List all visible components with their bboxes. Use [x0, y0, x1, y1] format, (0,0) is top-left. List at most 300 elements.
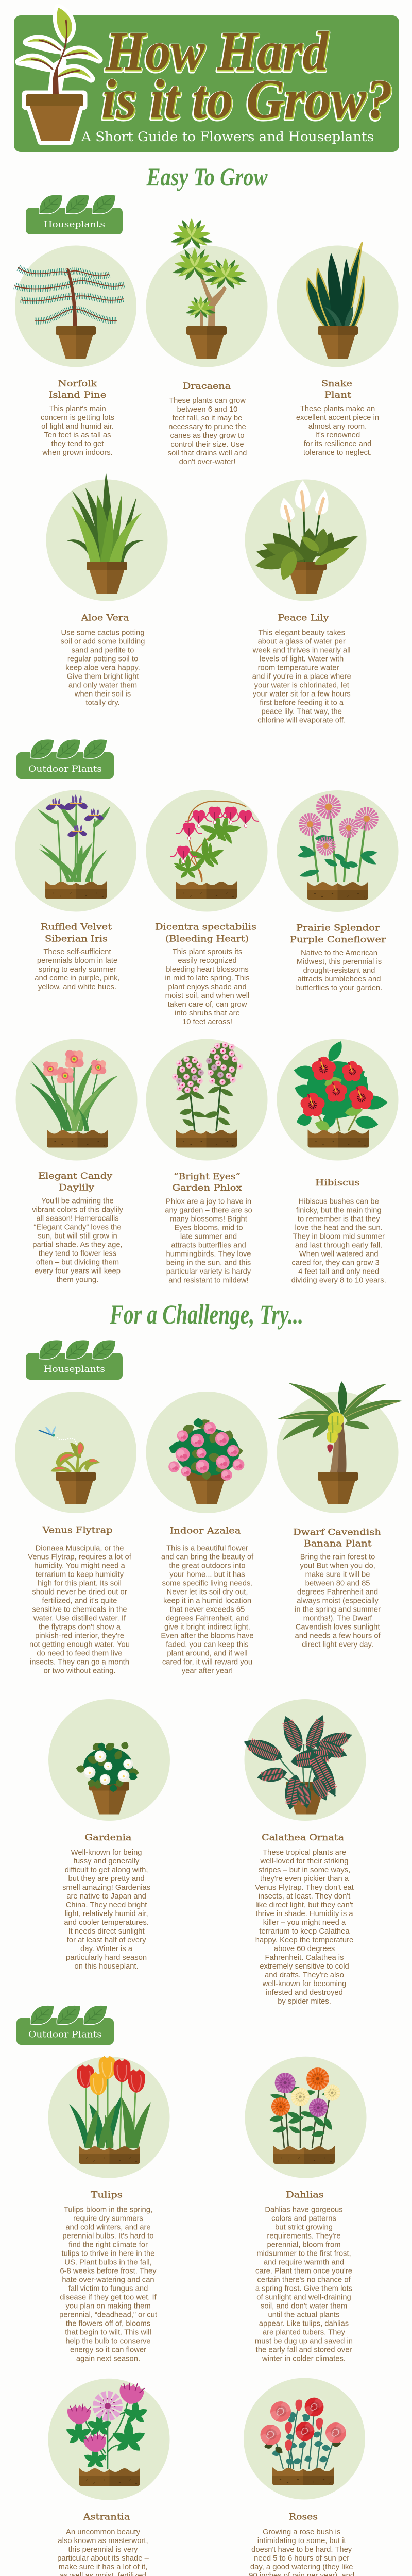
description: keep it in a humid location [163, 1597, 251, 1605]
description: particularly hard season [66, 1954, 147, 1962]
icon: Peace lily [254, 480, 360, 594]
tab: Outdoor Plants [16, 739, 114, 779]
description: perennial, bloom from [267, 2241, 341, 2249]
tab: Outdoor Plants: Outdoor Plants [28, 2030, 102, 2040]
description: vibrant colors of this daylily [32, 1206, 124, 1214]
title: is it to Grow? [101, 70, 392, 131]
description: extremely sensitive to cold [260, 1962, 349, 1971]
description: and last through early fall. [295, 1242, 382, 1250]
description: plant enjoys shade and [168, 983, 247, 991]
description: yellow, and white hues. [38, 983, 116, 991]
description: winter in colder climates. [262, 2355, 346, 2363]
description: your water sit for a few hours [253, 690, 351, 699]
header banner [14, 8, 399, 152]
name [293, 1527, 381, 1549]
description: levels of light. Water with [260, 655, 344, 664]
description: of light and humid air. [41, 422, 114, 431]
description: light, relatively humid air, [65, 1910, 148, 1918]
description: midsummer to the first frost, [256, 2250, 351, 2258]
name: Norfolk [58, 379, 97, 389]
description: intimidating to some, but it [258, 2537, 346, 2545]
description: many blossoms! Bright [170, 1215, 247, 1224]
description: require dry summers [73, 2215, 143, 2223]
description: These plants can grow [169, 397, 246, 405]
description: well-loved for their striking [260, 1857, 349, 1866]
description: regular potting soil to [67, 655, 138, 664]
description: and if you're in a place where [252, 673, 351, 681]
description: Midwest, this perennial is [297, 958, 382, 966]
description: hate over-watering and can [62, 2276, 154, 2284]
description: care. Plant them once you're [255, 2267, 352, 2276]
description: appear. Like tulips, dahlias [259, 2320, 349, 2328]
description: your home... but it has [169, 1571, 245, 1579]
description: drought-resistant and [303, 967, 375, 975]
description: for at least half of every [67, 1936, 146, 1944]
icon: Dracaena [170, 218, 247, 359]
description: These tropical plants are [263, 1849, 346, 1857]
description: plant around, and if well [167, 1650, 248, 1658]
description: help the bulb to conserve [65, 2337, 151, 2346]
name: Dicentra spectabilis [155, 922, 256, 933]
description: on this houseplant. [74, 1962, 139, 1971]
name: (Bleeding Heart) [165, 934, 249, 944]
description: Cavendish loves sunlight [296, 1623, 380, 1631]
name [321, 379, 352, 400]
description: of sunlight and well-draining [256, 2294, 351, 2302]
subtitle: A Short Guide to Flowers and Houseplants [81, 129, 374, 144]
description: almost any room. [308, 422, 367, 431]
description: again next season. [76, 2355, 140, 2363]
description: when their soil is [74, 690, 131, 699]
description: fertilized, and it's quite [42, 1597, 117, 1605]
description: like direct light, but they can't [255, 1901, 353, 1909]
description: Eyes blooms, mid to [174, 1224, 243, 1232]
description: Use some cactus potting [61, 629, 145, 637]
icon: Astrantia [65, 2381, 149, 2486]
description: often – but dividing them [36, 1259, 119, 1267]
name: Ruffled Velvet [41, 922, 112, 933]
description: 10 feet across! [182, 1018, 232, 1026]
description: a spring frost. Give them lots [255, 2285, 352, 2293]
description: disease if they get too wet. If [60, 2294, 157, 2302]
description: all season! Hemerocallis [36, 1215, 119, 1223]
description: moist soil, and when well [165, 992, 249, 1000]
description: to remember is that they [298, 1215, 380, 1224]
icon: Tulips [69, 2056, 151, 2164]
description: and cold winters, and are [65, 2224, 151, 2232]
panel: Calathea Ornata [241, 1699, 366, 2006]
panel: Dwarf Cavendish Banana Plant [277, 1381, 402, 1649]
description: always moist (especially [297, 1597, 379, 1605]
description: degrees Fahrenheit, and [166, 1615, 249, 1623]
icon: Norfolk pine [14, 267, 124, 359]
description: Well-known for being [71, 1849, 142, 1857]
description: also known as masterwort, [58, 2537, 148, 2545]
description: not getting enough water. You [29, 1641, 130, 1649]
description: and require warmth and [264, 2259, 344, 2267]
panel: Bleeding Heart [146, 790, 268, 1026]
description: sun, but will still grow in [38, 1232, 117, 1241]
description: peace lily. That way, the [262, 708, 342, 716]
description: finicky, but the main thing [296, 1207, 382, 1215]
icon: Phlox [172, 1042, 243, 1148]
description: perennials bloom in late [37, 957, 117, 965]
description: between 6 and 10 [177, 405, 237, 414]
description: killer – you might need a [263, 1919, 346, 1927]
panel: Siberian Iris [15, 790, 136, 991]
description: It's renowned [315, 431, 360, 439]
description: happy. Keep the temperature [255, 1936, 353, 1944]
description: feet tall, so it may be [173, 414, 242, 422]
description: Phlox are a joy to have in [166, 1198, 251, 1206]
description: They in bloom mid summer [293, 1233, 385, 1241]
description: or two without eating. [44, 1667, 115, 1675]
description: and drafts. They're also [265, 1971, 344, 1979]
description: faded, you can keep this [166, 1641, 249, 1649]
name: Snake [321, 379, 352, 389]
description: don't over-water! [179, 458, 235, 466]
panel: Dracaena [146, 218, 268, 466]
description: above 60 degrees [274, 1945, 335, 1953]
description: direct light every day. [302, 1640, 373, 1649]
description: any garden – there are so [165, 1207, 252, 1215]
description: are planted tubers. They [263, 2329, 346, 2337]
panel: Dahlias [245, 2057, 367, 2363]
icon: Iris [37, 794, 110, 899]
description: particular variety is hardy [166, 1268, 251, 1276]
description: energy so it can flower [70, 2346, 146, 2354]
panel: Tulips [48, 2056, 170, 2363]
panel: Peace Lily [245, 479, 367, 724]
description: This plant sprouts its [173, 948, 242, 956]
title: is it to Grow? [101, 69, 392, 130]
description: terrarium to keep Calathea [259, 1927, 350, 1936]
description: insects. They can go a month [30, 1658, 129, 1667]
description: terrarium to keep humidity [36, 1571, 124, 1579]
description: they're even pickier than a [260, 1875, 349, 1883]
description: soil or add some building [61, 638, 145, 646]
title: How Hard [105, 22, 329, 83]
description: when grown indoors. [42, 449, 113, 457]
panel: Aloe Vera [46, 472, 168, 707]
name: Garden Phlox [172, 1183, 242, 1193]
name: Dracaena [183, 381, 231, 392]
description: Even after the blooms have [161, 1632, 254, 1640]
description: taken care of, can grow [168, 1001, 247, 1009]
name: Plant [324, 390, 351, 400]
name: Peace Lily [278, 613, 329, 623]
title: How Hard [106, 22, 330, 83]
description: It needs direct sunlight [68, 1927, 145, 1936]
icon: Dahlias [269, 2067, 340, 2164]
panel: Snake Plant [277, 243, 399, 457]
description: requirements. They're [267, 2232, 341, 2241]
description: Hibiscus bushes can be [299, 1198, 379, 1206]
description: certain there's no chance of [257, 2276, 351, 2284]
name: Dahlias [286, 2190, 324, 2200]
description: but they are pretty and [68, 1875, 145, 1883]
icon: Venus flytrap [39, 1426, 100, 1504]
panel: Roses [244, 2378, 365, 2576]
icon: Daylily [30, 1050, 118, 1148]
description: being in the sun, and this [166, 1259, 251, 1267]
name [38, 1171, 112, 1193]
name [48, 379, 106, 400]
description: canes as they grow to [170, 432, 244, 440]
description: months!). The Dwarf [303, 1615, 372, 1623]
description: Never let its soil dry out, [167, 1588, 248, 1597]
name: Aloe Vera [80, 613, 129, 623]
description: and come in purple, pink, [35, 974, 120, 982]
description: by spider mites. [278, 1997, 331, 2006]
description: tulips to thrive in here in the [62, 2250, 154, 2258]
description: 6-8 weeks before frost. They [60, 2267, 157, 2276]
icon: Calathea [241, 1713, 354, 1815]
description: that never exceeds 65 [170, 1606, 245, 1614]
description: should never be dried out or [32, 1588, 127, 1597]
description: colors and patterns [271, 2215, 336, 2223]
name: Gardenia [84, 1833, 132, 1843]
description: about a glass of water per [258, 638, 346, 646]
description: These self-sufficient [43, 948, 111, 956]
name: Venus Flytrap [42, 1525, 113, 1535]
description: An uncommon beauty [66, 2528, 141, 2536]
tab: Houseplants [26, 195, 123, 234]
description: the flytraps don't show a [39, 1623, 121, 1632]
description: some specific living needs. [162, 1580, 253, 1588]
description: fall victim to fungus and [68, 2285, 148, 2293]
description: day. Winter is a [80, 1945, 133, 1953]
description: the early fall and stored over [256, 2346, 352, 2354]
description: into shrubs that are [175, 1009, 240, 1018]
title: is it to Grow? [102, 70, 393, 131]
description: hummingbirds. They love [166, 1250, 251, 1259]
name: “Bright Eyes” [174, 1172, 241, 1182]
description: well-known for becoming [262, 1980, 346, 1988]
panel: Norfolk Island Pine [14, 245, 136, 457]
description: Venus Flytrap, requires a lot of [28, 1553, 132, 1562]
description: they tend to get [51, 440, 104, 448]
name: Dwarf Cavendish [293, 1527, 381, 1537]
description: “Elegant Candy” loves the [33, 1224, 122, 1232]
description: must be dug up and saved in [255, 2337, 353, 2346]
description: These plants make an [300, 405, 375, 413]
tab: Outdoor Plants: Outdoor Plants [28, 764, 102, 774]
description: pinkish-red interior, they're [35, 1632, 124, 1640]
description: keep aloe vera happy. [65, 664, 140, 672]
description: cared for, it will reward you [162, 1658, 252, 1667]
description: difficult to get along with, [65, 1866, 148, 1874]
description: for its resilience and [304, 440, 371, 448]
name: Elegant Candy [38, 1171, 112, 1181]
description: dividing every 8 to 10 years. [291, 1277, 386, 1285]
description: insects, at least. They don't [259, 1892, 350, 1901]
description: This elegant beauty takes [258, 629, 345, 637]
description: and only water them [68, 681, 137, 689]
icon: Coneflower [297, 800, 377, 900]
description: stripes – but in some ways, [259, 1866, 350, 1874]
description: easily recognized [178, 957, 237, 965]
description: control their size. Use [170, 440, 244, 449]
description: When well watered and [299, 1250, 379, 1259]
description: particular about its shade – [57, 2554, 149, 2563]
description: late summer and [180, 1233, 237, 1241]
description: them young. [57, 1276, 98, 1284]
icon: Roses [260, 2398, 346, 2485]
heading: For a Challenge, Try...: For a Challenge, Try... [109, 1299, 303, 1330]
description: Bring the rain forest to [300, 1553, 375, 1561]
description: degrees Fahrenheit and [297, 1588, 378, 1596]
description: attracts bumblebees and [297, 975, 381, 984]
description: 4 feet tall and only need [298, 1268, 379, 1276]
description: you! But when you do, [300, 1562, 375, 1570]
description: and needs a few hours of [295, 1632, 381, 1640]
description: that begin to wilt. This will [65, 2329, 151, 2337]
description: cared for, they can grow 3 – [291, 1259, 386, 1267]
description: and cooler temperatures. [64, 1919, 149, 1927]
description: Give them bright light [67, 673, 139, 681]
tab: Houseplants [26, 1340, 123, 1380]
panel: Gardenia [48, 1699, 170, 1971]
description: you plan on making them [65, 2302, 151, 2311]
name: Daylily [59, 1183, 94, 1193]
description: your water is chlorinated, let [254, 681, 349, 689]
description: excellent accent piece in [296, 414, 379, 422]
description: make sure it will be [305, 1570, 370, 1579]
panel: Purple Coneflower [277, 790, 399, 992]
description: Dionaea Muscipula, or the [36, 1545, 124, 1553]
description: attracts butterflies and [171, 1242, 246, 1250]
description: they tend to flower less [39, 1250, 116, 1258]
description: in the spring and summer [295, 1605, 381, 1614]
icon: potted plant logo [19, 8, 99, 141]
description: year after year! [182, 1667, 233, 1675]
panel: Daylily [15, 1039, 137, 1284]
icon: Hibiscus [293, 1039, 387, 1148]
description: the flowers off of, blooms [66, 2320, 150, 2328]
description: This plant's main [49, 405, 106, 413]
name: Tulips [91, 2190, 123, 2200]
panel: Indoor Azalea [146, 1392, 268, 1675]
title: How Hard [105, 21, 329, 82]
description: fussy and generally [74, 1857, 140, 1866]
description: bleeding heart blossoms [166, 965, 249, 974]
description: find the right climate for [68, 2241, 148, 2249]
tab: Houseplants: Houseplants [44, 1364, 105, 1375]
icon: Azalea [168, 1417, 244, 1504]
description: This is a beautiful flower [166, 1545, 248, 1553]
description: partial shade. As they age, [32, 1241, 123, 1249]
description: sensitive to chemicals in the [32, 1606, 127, 1614]
description: sand and perlite to [72, 646, 134, 654]
description: infested and destroyed [266, 1989, 343, 1997]
description: tolerance to neglect. [303, 449, 372, 457]
description: high for this plant. Its soil [38, 1580, 122, 1588]
description: doesn't have to be hard. They [251, 2546, 352, 2554]
name [41, 922, 112, 944]
name: Banana Plant [304, 1538, 372, 1549]
description: perennial, “deadhead,” or cut [59, 2311, 157, 2319]
name: Calathea Ornata [262, 1833, 344, 1843]
description: Fahrenheit. Calathea is [265, 1954, 344, 1962]
icon: Banana plant [277, 1381, 402, 1504]
description: concern is getting lots [41, 414, 114, 422]
description: China. They need bright [66, 1901, 147, 1909]
name: Siberian Iris [45, 934, 108, 944]
description: love the heat and the sun. [295, 1224, 383, 1232]
description: water. Use distilled water. If [33, 1615, 126, 1623]
description: chlorine will evaporate off. [258, 716, 346, 724]
name: Hibiscus [315, 1178, 360, 1188]
description: give it bright indirect light. [164, 1623, 250, 1632]
name: Prairie Splendor [296, 923, 380, 934]
description: totally dry. [85, 699, 120, 707]
description: first before feeding it to a [260, 699, 344, 707]
description: soil that drains well and [168, 449, 247, 457]
name: Island Pine [48, 390, 106, 400]
description: until the actual plants [268, 2311, 340, 2319]
description: room temperature water – [258, 664, 346, 672]
name [155, 922, 256, 944]
description: and can bring the beauty of [161, 1553, 254, 1562]
description: perennial bulbs. It's hard to [62, 2232, 154, 2241]
heading: Easy To Grow: Easy To Grow [146, 162, 268, 191]
panel: Astrantia [48, 2379, 170, 2576]
description: You'll be admiring the [41, 1197, 114, 1206]
icon: Aloe [67, 472, 144, 594]
description: in mid to late spring. This [165, 974, 250, 982]
icon: Bleeding heart [170, 801, 259, 899]
description: and resistant to mildew! [168, 1277, 249, 1285]
panel: Hibiscus [277, 1039, 399, 1285]
description: thrive in shade. Humidity is a [255, 1910, 353, 1918]
description: every four years will keep [35, 1267, 121, 1276]
description: do need to feed them live [37, 1650, 123, 1658]
icon: Gardenia [76, 1740, 140, 1815]
description: are native to Japan and [66, 1892, 146, 1901]
name: Indoor Azalea [170, 1526, 241, 1536]
icon: Snake plant [307, 243, 365, 359]
description: need 5 to 6 hours of sun per [254, 2554, 349, 2563]
description: between 80 and 85 [305, 1580, 370, 1588]
name: Astrantia [82, 2512, 130, 2522]
description: soil, and don't water them [261, 2302, 347, 2311]
description: spring to early summer [39, 965, 116, 974]
description: Tulips bloom in the spring, [64, 2206, 152, 2214]
description: smell amazing! Gardenias [62, 1884, 150, 1892]
name: Roses [289, 2512, 318, 2522]
description: Growing a rose bush is [263, 2528, 340, 2536]
tab: Houseplants: Houseplants [44, 219, 105, 230]
description: Ten feet is as tall as [44, 431, 111, 439]
description: the great outdoors into [169, 1562, 246, 1570]
description: Native to the American [301, 949, 377, 957]
description: but strict growing [275, 2224, 333, 2232]
name: Purple Coneflower [289, 935, 386, 945]
description: US. Plant bulbs in the fall, [64, 2259, 152, 2267]
description: week and thrives in nearly all [252, 646, 351, 654]
name [172, 1172, 242, 1193]
description: Dahlias have gorgeous [265, 2206, 343, 2214]
description: this perennial is very [68, 2546, 138, 2554]
description: humidity. You might need a [34, 1562, 126, 1570]
description: Venus Flytrap. They don't eat [255, 1884, 354, 1892]
description: day, a good watering (they like [250, 2563, 353, 2571]
description: butterflies to your garden. [296, 984, 382, 992]
description: make sure it has a lot of it, [59, 2563, 147, 2571]
name [289, 923, 386, 945]
panel: Venus Flytrap [15, 1392, 136, 1675]
